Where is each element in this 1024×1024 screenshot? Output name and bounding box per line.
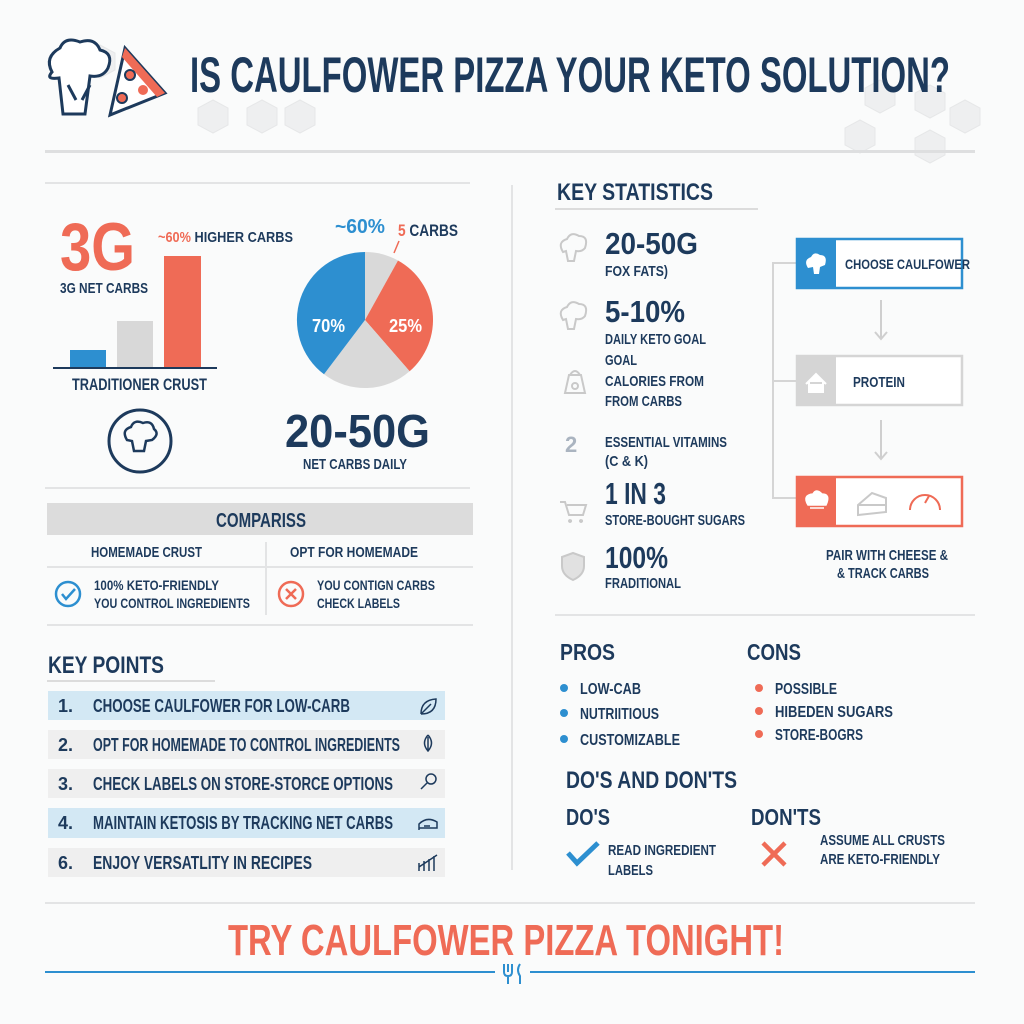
panel: key statistics: 100% bbox=[605, 540, 668, 575]
pie chart: ~60% bbox=[335, 216, 385, 238]
stat: net carbs daily: 20-50G bbox=[285, 405, 430, 457]
panel: key statistics: CALORIES FROM bbox=[605, 373, 704, 390]
panel: key points bbox=[47, 652, 445, 877]
pie chart: 25% bbox=[389, 316, 422, 336]
pie chart bbox=[297, 216, 458, 388]
panel: key points: CHECK LABELS ON STORE-STORCE OPTIONS bbox=[93, 774, 393, 794]
panel: key points: ENJOY VERSATLITY IN RECIPES bbox=[93, 853, 312, 873]
pie chart: 5 CARBS bbox=[398, 221, 458, 240]
panel: pros and cons: CUSTOMIZABLE bbox=[580, 732, 680, 749]
panel: comparison table: COMPARISS bbox=[216, 510, 306, 532]
flowchart bbox=[773, 238, 970, 582]
panel: dos and donts: DO'S AND DON'TS bbox=[566, 767, 737, 794]
flowchart: PAIR WITH CHEESE & bbox=[826, 547, 948, 564]
icon: fork and knife bbox=[504, 964, 520, 984]
panel: comparison table: YOU CONTROL INGREDIENTS bbox=[94, 595, 250, 611]
panel: key statistics: DAILY KETO GOAL bbox=[605, 331, 706, 348]
panel: key points: 4. bbox=[58, 813, 73, 833]
panel: key points: 3. bbox=[58, 774, 73, 794]
panel: pros and cons: STORE-BOGRS bbox=[775, 727, 863, 744]
panel: comparison table: HOMEMADE CRUST bbox=[91, 544, 202, 561]
panel: dos and donts: LABELS bbox=[608, 862, 653, 879]
panel: key statistics: 20-50G bbox=[605, 226, 698, 261]
panel: pros and cons: POSSIBLE bbox=[775, 681, 837, 698]
panel: pros and cons: PROS bbox=[560, 639, 615, 665]
panel: dos and donts bbox=[566, 767, 945, 879]
panel: dos and donts: ASSUME ALL CRUSTS bbox=[820, 832, 945, 849]
panel: key statistics: KEY STATISTICS bbox=[557, 179, 713, 206]
panel: key statistics: ESSENTIAL VITAMINS bbox=[605, 434, 727, 451]
panel: key statistics: GOAL bbox=[605, 352, 637, 369]
icon: cauliflower circle bbox=[109, 410, 171, 472]
panel: key points: 6. bbox=[58, 853, 73, 873]
pie chart: 70% bbox=[312, 316, 345, 336]
panel: carb comparison bar chart: 3G NET CARBS bbox=[60, 280, 148, 297]
panel: carb comparison bar chart: ~60% HIGHER CARBS bbox=[158, 229, 293, 246]
panel: key statistics: STORE-BOUGHT SUGARS bbox=[605, 512, 745, 529]
call to action: TRY CAULFOWER PIZZA TONIGHT! bbox=[228, 916, 784, 965]
panel: pros and cons: HIBEDEN SUGARS bbox=[775, 704, 893, 721]
panel: key points: OPT FOR HOMEMADE TO CONTROL INGREDIENTS bbox=[93, 735, 400, 755]
panel: key statistics: (C & K) bbox=[605, 453, 648, 470]
panel: comparison table: OPT FOR HOMEMADE bbox=[290, 544, 418, 561]
panel: key statistics bbox=[555, 179, 758, 592]
flowchart: CHOOSE CAULFOWER bbox=[845, 256, 970, 272]
panel: pros and cons: LOW-CAB bbox=[580, 681, 641, 698]
panel: key statistics: FROM CARBS bbox=[605, 393, 682, 410]
panel: key statistics: FRADITIONAL bbox=[605, 575, 681, 592]
panel: key points: CHOOSE CAULFOWER FOR LOW-CARB bbox=[93, 696, 350, 716]
panel: key points: KEY POINTS bbox=[48, 652, 164, 679]
panel: comparison table: CHECK LABELS bbox=[317, 595, 400, 611]
panel: key statistics: FOX FATS) bbox=[605, 263, 668, 280]
panel: key points: MAINTAIN KETOSIS BY TRACKING NET CARBS bbox=[93, 813, 393, 833]
icon: cauliflower and pizza bbox=[49, 40, 165, 115]
panel: pros and cons bbox=[560, 639, 893, 749]
panel: carb comparison bar chart: TRADITIONER CRUST bbox=[72, 375, 207, 394]
flowchart: & TRACK CARBS bbox=[837, 565, 929, 582]
panel: key statistics: 1 IN 3 bbox=[605, 476, 666, 511]
panel: dos and donts: DON'TS bbox=[751, 804, 821, 830]
stat: net carbs daily: NET CARBS DAILY bbox=[303, 456, 407, 473]
panel: carb comparison bar chart bbox=[53, 209, 293, 394]
panel: pros and cons: NUTRIITIOUS bbox=[580, 706, 659, 723]
panel: key statistics: 2 bbox=[565, 432, 577, 457]
panel: dos and donts: READ INGREDIENT bbox=[608, 842, 716, 859]
panel: key statistics: 5-10% bbox=[605, 294, 685, 329]
panel: pros and cons: CONS bbox=[747, 639, 801, 665]
panel: key points: 1. bbox=[58, 696, 73, 716]
panel: comparison table bbox=[47, 503, 473, 626]
panel: dos and donts: ARE KETO-FRIENDLY bbox=[820, 851, 940, 868]
panel: comparison table: YOU CONTIGN CARBS bbox=[317, 577, 435, 593]
panel: comparison table: 100% KETO-FRIENDLY bbox=[94, 577, 220, 593]
panel: dos and donts: DO'S bbox=[566, 804, 610, 830]
panel: key points: 2. bbox=[58, 735, 73, 755]
flowchart: PROTEIN bbox=[853, 374, 905, 391]
panel: carb comparison bar chart: 3G bbox=[60, 209, 135, 285]
